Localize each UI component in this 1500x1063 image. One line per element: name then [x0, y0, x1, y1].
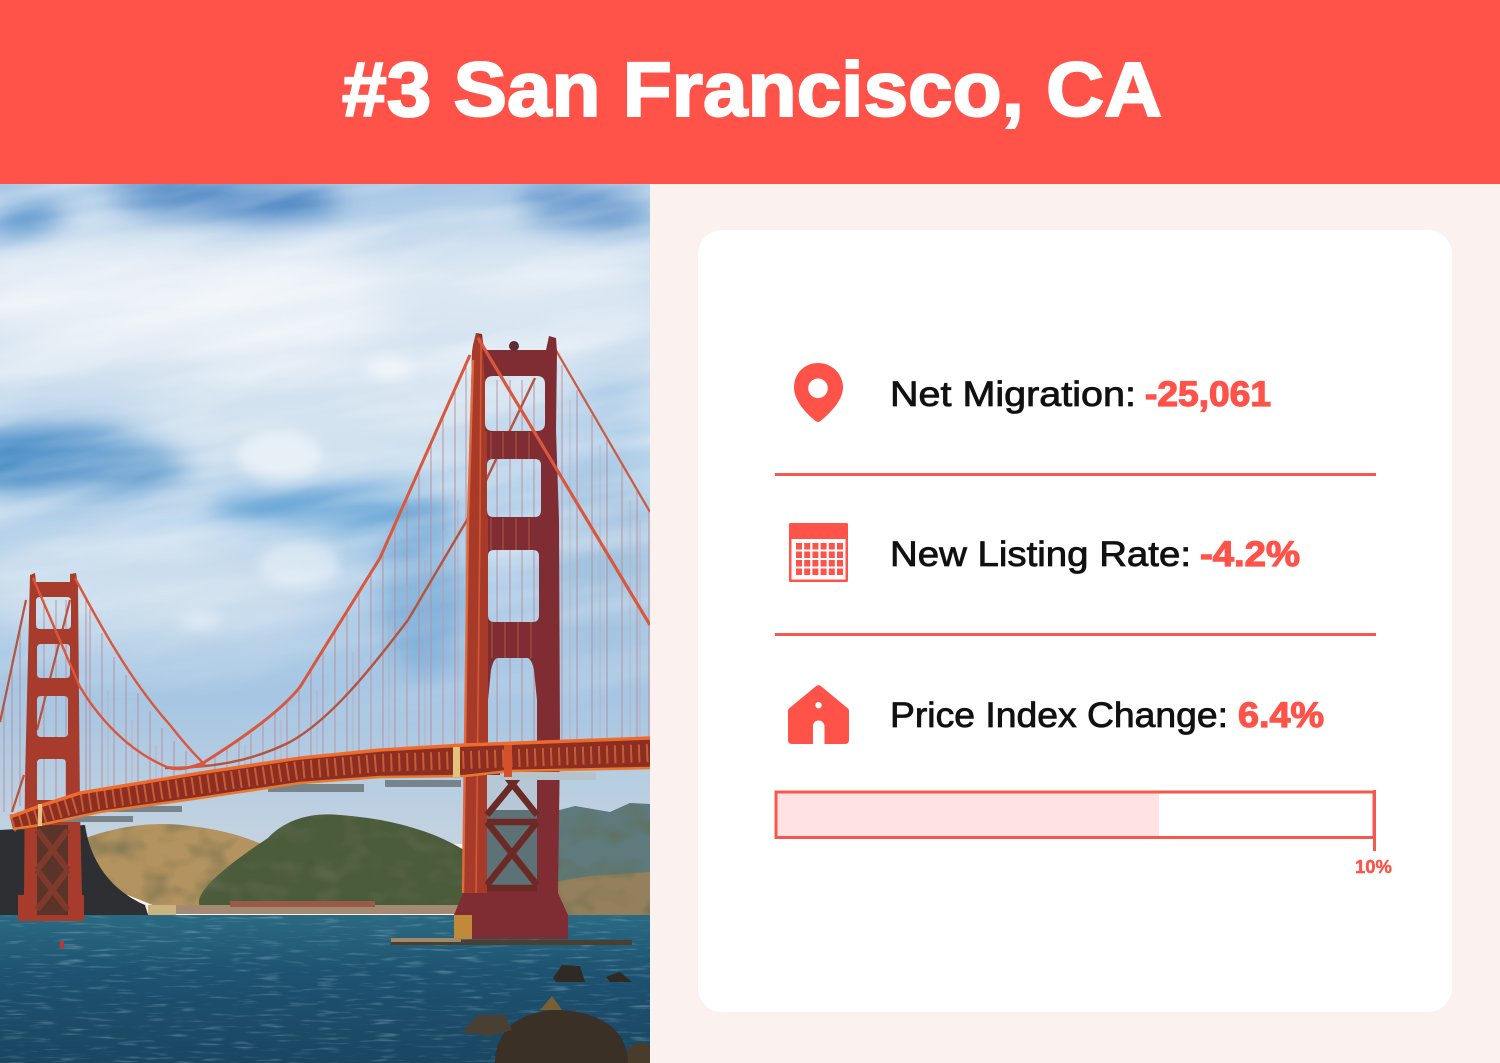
tower cap ornament	[509, 341, 519, 351]
icon: house	[788, 685, 849, 744]
foreground rocks	[462, 965, 650, 1063]
maintenance platforms	[58, 772, 596, 822]
photo: Golden Gate Bridge	[0, 184, 650, 1063]
title: #3 San Francisco, CA	[342, 47, 1162, 133]
bridge deck	[10, 738, 650, 829]
icon: calendar	[789, 523, 848, 582]
pier	[391, 940, 632, 945]
shoreline	[175, 905, 465, 914]
deck tower joints	[453, 747, 460, 777]
strut details	[491, 432, 531, 658]
label: price index change: Price Index Change:	[890, 696, 1228, 735]
left tower	[18, 573, 84, 921]
value: new listing rate: -4.2%	[1200, 535, 1300, 574]
cables and suspenders behind towers	[0, 340, 650, 812]
tan foreground right	[558, 872, 650, 915]
small lighthouse	[148, 905, 176, 915]
sunlit left leg	[463, 333, 488, 893]
scale label: 10%	[1355, 856, 1392, 877]
water	[0, 915, 650, 1063]
row: price index change	[788, 685, 1324, 744]
divider	[775, 473, 1376, 476]
divider	[775, 633, 1376, 636]
green hill	[199, 814, 468, 906]
stats card	[698, 230, 1452, 1012]
progress bar: 6.4% of 10%	[776, 790, 1392, 877]
back cables	[165, 378, 535, 768]
icon: map pin	[794, 363, 843, 422]
label: new listing rate: New Listing Rate:	[890, 535, 1191, 574]
suspenders	[4, 364, 649, 812]
row: net migration	[794, 363, 1271, 422]
left rock headland	[0, 825, 150, 921]
tower body with openings	[454, 333, 568, 939]
right distant hill	[558, 803, 650, 882]
tan hill	[88, 824, 260, 905]
value: net migration: -25,061	[1145, 375, 1271, 414]
row: new listing rate	[789, 523, 1300, 582]
sky with clouds	[0, 184, 650, 844]
lower opening with bracing	[487, 775, 537, 888]
distant and foreground hills	[0, 803, 650, 921]
label: net migration: Net Migration:	[890, 375, 1136, 414]
right tower	[391, 333, 632, 945]
title banner	[0, 0, 1500, 184]
scale tick	[1373, 790, 1376, 851]
value: price index change: 6.4%	[1238, 696, 1324, 735]
front main cables	[33, 338, 650, 769]
red buoy	[60, 941, 64, 948]
